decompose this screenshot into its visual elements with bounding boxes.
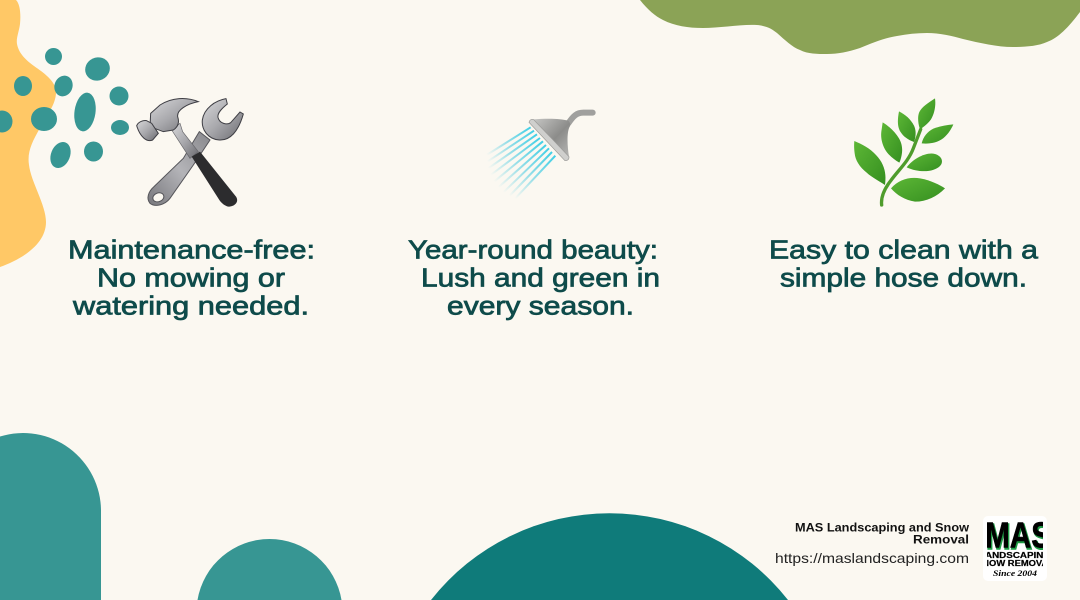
logo bbox=[983, 516, 1047, 581]
text block: maintenance-free: watering needed. bbox=[72, 290, 309, 320]
leaves bbox=[854, 98, 953, 202]
logo: landscaping line: LANDSCAPING bbox=[979, 551, 1051, 560]
decoration: yellow blob bbox=[0, 0, 56, 267]
logo: MAS wordmark bbox=[987, 522, 1043, 550]
rim bbox=[529, 119, 569, 161]
icon: shower head bbox=[487, 113, 593, 199]
text block: year-round beauty: Year-round beauty: bbox=[408, 234, 658, 264]
logo: snow removal line: SNOW REMOVAL bbox=[976, 559, 1054, 568]
decoration: dark teal dome bbox=[431, 513, 788, 600]
pipe bbox=[568, 113, 593, 123]
decoration: teal arch left bbox=[0, 433, 101, 600]
decoration: teal dots bbox=[0, 48, 129, 171]
decoration: teal semicircle bbox=[198, 539, 342, 600]
water jets bbox=[487, 127, 555, 199]
decoration: olive blob bbox=[640, 0, 1080, 54]
stem bbox=[882, 129, 921, 205]
text block: easy to clean: Easy to clean with a bbox=[769, 234, 1039, 264]
footer: company name: Removal bbox=[913, 532, 969, 546]
logo: MAS wordmark: MAS bbox=[986, 516, 1052, 557]
cone bbox=[533, 119, 570, 157]
logo: since 2004: Since 2004 bbox=[993, 569, 1037, 578]
hammer bbox=[137, 98, 237, 207]
icon: hammer and wrench bbox=[137, 98, 243, 207]
text block: year-round beauty: every season. bbox=[447, 290, 634, 320]
text block: maintenance-free: Maintenance-free: bbox=[68, 234, 315, 264]
wrench bbox=[148, 99, 243, 205]
text block: easy to clean: simple hose down. bbox=[780, 262, 1027, 292]
icon: green herb sprig bbox=[854, 98, 953, 205]
logo: MAS wordmark: MAS bbox=[985, 514, 1051, 556]
footer: company name: MAS Landscaping and Snow bbox=[795, 520, 970, 534]
footer: website url: https://maslandscaping.com bbox=[775, 550, 969, 566]
text block: year-round beauty: Lush and green in bbox=[421, 262, 660, 292]
text block: maintenance-free: No mowing or bbox=[97, 262, 285, 292]
